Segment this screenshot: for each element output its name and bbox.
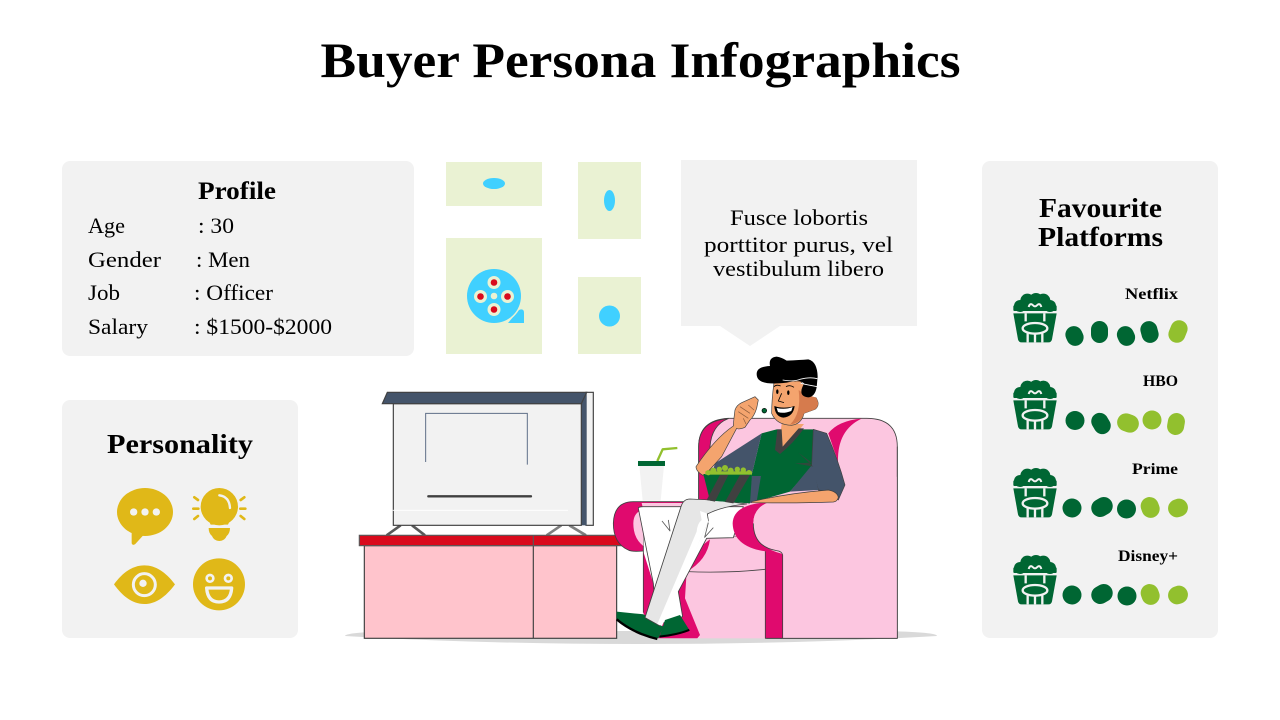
profile rows xyxy=(88,213,332,339)
platforms heading: Favourite xyxy=(1039,193,1162,223)
callout: speech bubble xyxy=(681,160,917,346)
head xyxy=(757,357,818,425)
row: hbo: HBO xyxy=(1143,373,1178,390)
callout: speech bubble: Fusce lobortis xyxy=(730,205,868,230)
cabinet xyxy=(359,535,622,638)
profile rows: Age xyxy=(88,213,125,238)
tv xyxy=(382,392,593,525)
icon: popcorn xyxy=(1013,468,1057,517)
rating dots xyxy=(1059,494,1190,521)
panel: personality xyxy=(62,400,298,638)
icon: popcorn xyxy=(1013,380,1057,429)
shoes xyxy=(617,612,689,639)
row: prime xyxy=(1013,461,1190,521)
personality icons xyxy=(114,488,245,610)
floor shadow xyxy=(345,631,937,644)
row: disney+: Disney+ xyxy=(1118,548,1178,565)
rating dots xyxy=(1059,581,1190,608)
title: Buyer Persona Infographics xyxy=(320,32,960,88)
platforms heading xyxy=(1038,193,1163,252)
callout: speech bubble: vestibulum libero xyxy=(713,256,884,281)
rating dots xyxy=(1063,318,1190,349)
illustration: man on sofa xyxy=(613,357,897,639)
panel: photo tiles xyxy=(446,162,641,354)
torso xyxy=(712,429,845,503)
icon: speech bubble xyxy=(117,488,173,545)
icon: smiley xyxy=(193,558,245,610)
profile rows: : $1500-$2000 xyxy=(194,314,332,339)
profile rows: : Officer xyxy=(194,280,274,305)
sofa back xyxy=(699,418,897,638)
icon: eye xyxy=(114,565,175,604)
forearm xyxy=(752,490,838,503)
profile rows: Gender xyxy=(88,247,162,272)
sofa seat xyxy=(643,537,767,638)
tile film reel xyxy=(446,238,542,354)
back leg xyxy=(638,507,743,625)
tv stand legs xyxy=(387,525,425,535)
fingers xyxy=(738,405,754,424)
icon: film reel xyxy=(466,268,524,324)
panel: favourite platforms xyxy=(982,161,1218,638)
icon: popcorn xyxy=(1013,293,1057,342)
row: prime: Prime xyxy=(1132,461,1178,478)
cup xyxy=(638,448,677,501)
tile bottom right xyxy=(578,277,641,354)
tile top left xyxy=(446,162,542,206)
profile rows: Salary xyxy=(88,314,148,339)
illustration: tv on cabinet xyxy=(359,392,622,638)
popcorn bucket xyxy=(703,465,752,503)
sofa right arm xyxy=(733,447,897,638)
panel: profile xyxy=(62,161,414,356)
profile rows: Job xyxy=(88,280,120,305)
profile rows: : Men xyxy=(196,247,250,272)
icon: popcorn xyxy=(1013,555,1057,604)
row: netflix xyxy=(1013,286,1190,349)
front leg xyxy=(645,499,747,626)
platforms heading: Platforms xyxy=(1038,222,1163,252)
icon: light bulb xyxy=(193,488,245,541)
neck and collar xyxy=(775,424,804,454)
row: hbo xyxy=(1013,373,1186,437)
row: disney+ xyxy=(1013,548,1190,608)
tile top right xyxy=(578,162,641,239)
raised arm xyxy=(696,397,758,476)
profile rows: : 30 xyxy=(198,213,234,238)
rating dots xyxy=(1066,410,1186,437)
personality heading: Personality xyxy=(107,429,254,459)
callout: speech bubble: porttitor purus, vel xyxy=(704,232,893,257)
profile heading: Profile xyxy=(198,178,276,205)
popcorn piece xyxy=(762,408,767,413)
sofa left arm xyxy=(613,502,683,551)
row: netflix: Netflix xyxy=(1125,286,1178,303)
